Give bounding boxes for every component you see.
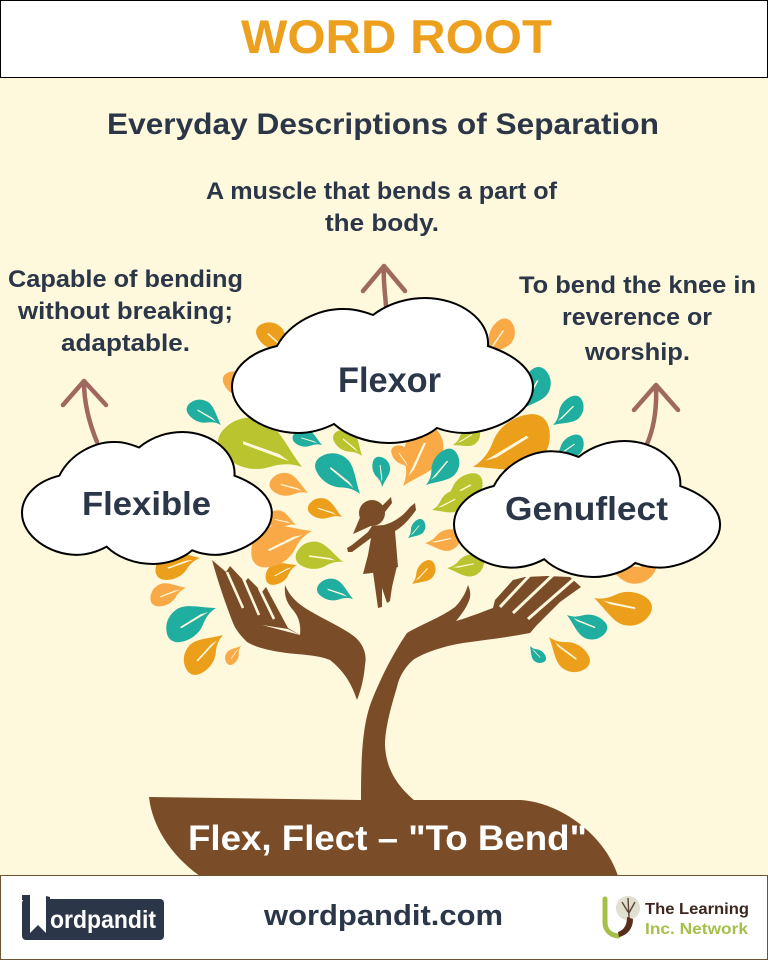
learning inc network logo: The Learning	[645, 901, 749, 918]
definition: genuflect: reverence or	[562, 304, 712, 331]
title: WORD ROOT	[241, 10, 552, 63]
definition: flexible: Capable of bending	[8, 266, 243, 293]
definition: genuflect: To bend the knee in	[519, 272, 756, 299]
cloud: flexible	[22, 432, 272, 564]
cloud: genuflect: Genuflect	[505, 490, 668, 527]
header banner	[0, 0, 768, 78]
wordpandit logo	[22, 890, 164, 940]
definition: flexible: without breaking;	[17, 298, 233, 325]
cloud: flexible: Flexible	[82, 485, 211, 522]
cloud: flexor	[232, 298, 533, 443]
definition: genuflect: worship.	[584, 339, 690, 366]
subtitle: Everyday Descriptions of Separation	[107, 108, 659, 141]
definition: flexor	[206, 178, 558, 237]
child silhouette	[347, 497, 416, 608]
arrow: up to flexor definition	[363, 266, 405, 306]
definition: flexor: A muscle that bends a part of	[206, 178, 558, 205]
definition: flexible	[8, 266, 243, 357]
definition: flexible: adaptable.	[61, 330, 190, 357]
learning inc network logo	[605, 896, 749, 938]
definition: flexor: the body.	[325, 210, 439, 237]
learning inc network logo: Inc. Network	[645, 921, 748, 938]
foliage	[147, 315, 659, 680]
website: wordpandit.com	[263, 900, 503, 932]
wordpandit logo: ordpandit	[50, 906, 157, 934]
cloud: genuflect	[454, 441, 720, 577]
footer	[0, 876, 768, 960]
ground mound	[149, 797, 618, 876]
arrow: up to genuflect definition	[634, 385, 678, 444]
arrow: up to flexible definition	[63, 381, 106, 442]
open left hand	[212, 560, 366, 700]
word root label: Flex, Flect – "To Bend"	[188, 819, 587, 858]
cloud: flexor: Flexor	[338, 361, 441, 400]
definition: genuflect	[519, 272, 756, 366]
tree trunk with open right hand	[361, 575, 581, 805]
